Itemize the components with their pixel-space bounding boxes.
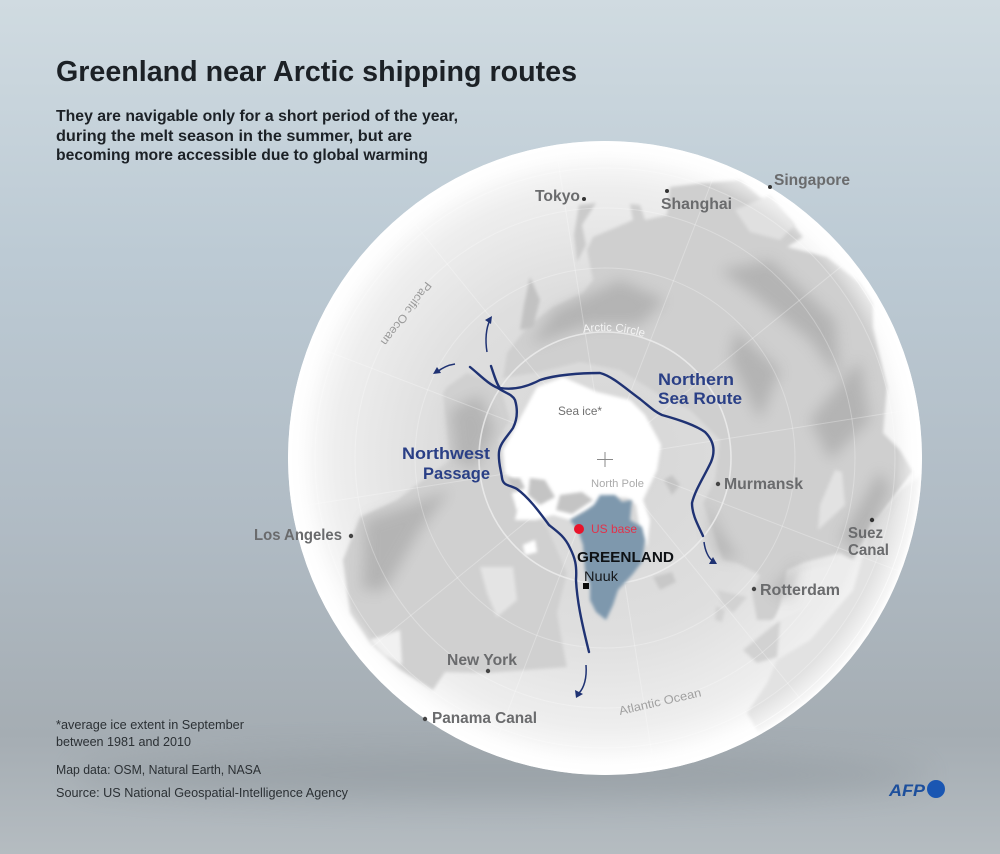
land: Arctic isles (664, 476, 680, 494)
route labels: Sea Route (658, 389, 742, 408)
subtitle (56, 108, 458, 164)
ocean and circle labels: Atlantic Ocean (618, 685, 703, 718)
arrow head europe (709, 557, 717, 564)
greenland (570, 495, 645, 620)
terrain shading (362, 260, 890, 600)
land: North America (343, 373, 567, 690)
subtitle: They are navigable only for a short period of the year, (56, 108, 458, 125)
arrow: alaska (437, 364, 455, 372)
city labels: New York (447, 652, 517, 669)
city labels (254, 172, 889, 727)
arrow head atlantic (575, 690, 583, 698)
footnotes (56, 718, 349, 800)
graticule (348, 181, 896, 705)
arctic circle (479, 332, 731, 584)
city labels: Panama Canal (432, 710, 537, 727)
north pole marker: North Pole (591, 478, 644, 490)
greenland labels: GREENLAND (577, 549, 674, 566)
afp logo (888, 780, 945, 800)
northern sea route (491, 366, 713, 536)
map globe (288, 141, 922, 775)
greenland labels (574, 522, 674, 589)
footnotes: Map data: OSM, Natural Earth, NASA (56, 763, 262, 777)
arrow head alaska (433, 367, 441, 374)
sea ice label: Sea ice* (558, 404, 602, 418)
arrows (433, 316, 717, 698)
ocean and circle labels: Pacific Ocean (378, 279, 433, 347)
ocean and circle labels: Arctic Circle (583, 322, 644, 336)
ocean and circle labels (378, 279, 703, 718)
land: Africa (748, 482, 916, 733)
subtitle: becoming more accessible due to global warming (56, 147, 428, 164)
city labels: Canal (848, 542, 889, 559)
title: Greenland near Arctic shipping routes (56, 56, 577, 88)
footnotes: Source: US National Geospatial-Intelligence Agency (56, 786, 349, 800)
route labels (402, 370, 742, 483)
city labels: Rotterdam (760, 582, 840, 599)
sea ice (503, 377, 661, 547)
city labels: Los Angeles (254, 527, 342, 544)
footnotes: *average ice extent in September (56, 718, 244, 732)
subtitle: during the melt season in the summer, but are (56, 128, 412, 145)
arrow: europe (704, 542, 713, 561)
afp logo: AFP (888, 781, 926, 800)
city labels: Tokyo (535, 188, 580, 205)
arrow: north pacific (486, 320, 490, 352)
footnotes: between 1981 and 2010 (56, 735, 191, 749)
city labels: Shanghai (661, 196, 732, 213)
us base: US base (591, 522, 637, 536)
city labels: Suez (848, 525, 883, 542)
canadian arctic islands (507, 478, 593, 514)
arrow head north (485, 316, 492, 324)
nuuk: Nuuk (584, 569, 618, 584)
city labels: Singapore (774, 172, 850, 189)
route labels: Northwest (402, 444, 490, 463)
land: Eurasia (503, 180, 913, 663)
northwest passage route (470, 367, 589, 652)
city labels: Murmansk (724, 476, 803, 493)
north pole marker (591, 452, 644, 490)
light interior seas and deserts (736, 197, 845, 621)
route labels: Northern (658, 370, 734, 389)
route labels: Passage (423, 464, 490, 483)
arrow: atlantic (579, 665, 586, 693)
